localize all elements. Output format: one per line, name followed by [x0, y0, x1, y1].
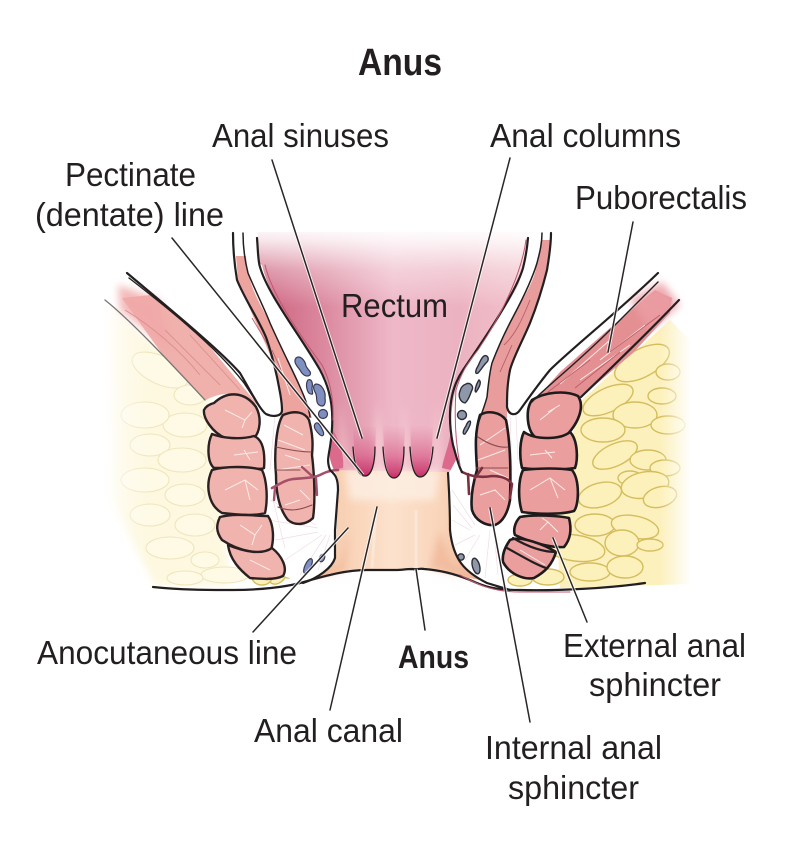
external sphincter: right blocks	[503, 393, 581, 578]
veins: right	[458, 356, 488, 575]
label: Anal columns: Anal columns	[490, 117, 681, 154]
label: Pectinate (dentate) line	[35, 156, 224, 233]
label: Pectinate (dentate) line: (dentate) line	[35, 196, 224, 233]
label: Anal sinuses: Anal sinuses	[212, 117, 389, 154]
anal sinuses: pocket shapes	[327, 422, 460, 478]
label: Anal canal: Anal canal	[254, 712, 403, 749]
column highlights	[337, 400, 352, 470]
label: Internal anal sphincter: Internal anal	[485, 729, 662, 766]
outline strokes: tissue layers	[105, 233, 679, 592]
label: Puborectalis: Puborectalis	[575, 179, 747, 216]
internal sphincter: right	[471, 412, 510, 525]
blood vessels: connecting branches	[272, 467, 512, 500]
leader lines	[172, 158, 633, 722]
label: Anocutaneous line: Anocutaneous line	[37, 634, 297, 671]
label: Internal anal sphincter	[485, 729, 662, 806]
fat tissue: right	[478, 300, 692, 595]
muscle: right longitudinal layer	[477, 240, 551, 425]
label: Rectum: Rectum	[341, 287, 448, 324]
puborectalis: right	[533, 282, 680, 402]
label: External anal sphincter: External anal	[563, 627, 746, 664]
anal canal	[303, 470, 480, 583]
label: External anal sphincter: sphincter	[589, 666, 721, 703]
puborectalis: left	[118, 285, 258, 405]
label: Internal anal sphincter: sphincter	[508, 769, 639, 806]
perianal spaces: submucosa and fan of fibres	[245, 255, 538, 590]
muscle: left longitudinal layer	[236, 256, 312, 418]
title: Anus	[358, 42, 442, 84]
label: Anus (bold): Anus	[398, 639, 469, 675]
external sphincter: left blocks	[204, 394, 285, 579]
label: Pectinate (dentate) line: Pectinate	[65, 156, 196, 193]
veins: left	[295, 357, 328, 575]
fat tissue: left	[100, 300, 305, 590]
illustration: anatomy cross-section	[100, 225, 692, 595]
label: External anal sphincter	[563, 627, 746, 703]
rectum interior	[250, 225, 535, 480]
internal sphincter: left	[275, 412, 314, 524]
